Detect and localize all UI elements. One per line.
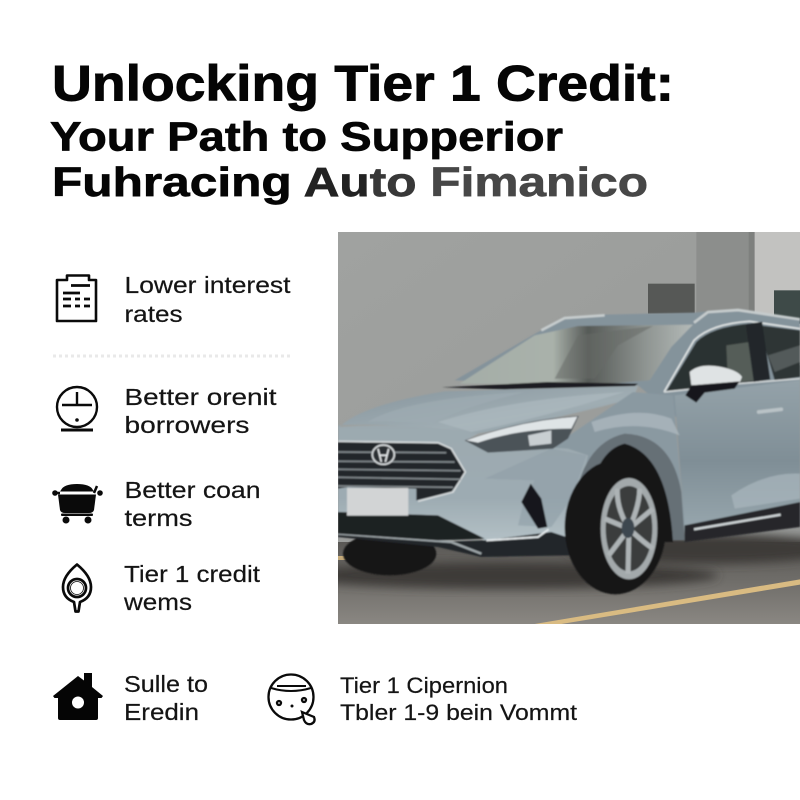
air intake — [521, 484, 547, 529]
car photo — [338, 232, 800, 624]
windshield — [460, 325, 693, 385]
title — [50, 56, 674, 205]
side door panel — [675, 380, 800, 527]
lower bumper trim — [338, 532, 571, 557]
text: better credit borrowers: Better orenit — [124, 384, 277, 410]
text: sulle to eredin: Eredin — [124, 699, 199, 725]
title: Your Path to Supperior — [50, 114, 563, 160]
car — [338, 310, 800, 594]
benefit: better credit borrowers — [57, 384, 277, 438]
dotted divider — [53, 354, 290, 358]
headlight — [465, 416, 579, 453]
grille — [338, 441, 465, 500]
text: better loan terms: terms — [124, 505, 192, 531]
benefit: sulle to eredin — [53, 671, 208, 725]
benefit: lower interest rates — [57, 272, 291, 327]
benefit: tier 1 comparison — [268, 673, 578, 725]
title: Fuhracing Au to Fimanico — [52, 159, 648, 205]
title: Unlocking Tier 1 Credit: — [52, 56, 674, 112]
text: tier 1 credit: wems — [123, 589, 192, 615]
badge — [372, 445, 394, 464]
front fender — [556, 392, 681, 484]
side windows — [666, 324, 759, 391]
text: tier 1 comparison: Tier 1 Cipernion — [340, 673, 508, 698]
text: tier 1 comparison: Tbler 1-9 bein Vommt — [340, 700, 578, 725]
text: better credit borrowers: borrowers — [124, 412, 250, 438]
front under-tyres — [343, 532, 436, 575]
side mirror — [690, 366, 742, 385]
icon: clipboard — [57, 276, 96, 321]
icon: house — [53, 673, 103, 720]
text: tier 1 credit: Tier 1 credit — [124, 561, 261, 587]
text: sulle to eredin: Sulle to — [124, 671, 208, 697]
icon: round face with key — [268, 674, 315, 724]
text: better loan terms: Better coan — [124, 477, 260, 503]
icon: pot — [52, 484, 103, 524]
front bumper — [338, 426, 588, 547]
benefit: tier 1 credit — [63, 561, 261, 615]
roof rail — [541, 310, 800, 330]
hood — [338, 386, 638, 436]
icon: drop with ring — [63, 564, 91, 612]
front wheel — [565, 460, 666, 594]
roof and side silhouette — [455, 311, 800, 539]
wheel arch — [571, 434, 685, 542]
icon: circle gauge — [57, 387, 97, 430]
text: lower interest rates: rates — [124, 301, 182, 327]
licence plate — [347, 488, 408, 516]
text: lower interest rates: Lower interest — [124, 272, 291, 298]
parking ground — [291, 534, 800, 624]
building wall — [338, 232, 800, 565]
benefit: better loan terms — [52, 477, 261, 531]
